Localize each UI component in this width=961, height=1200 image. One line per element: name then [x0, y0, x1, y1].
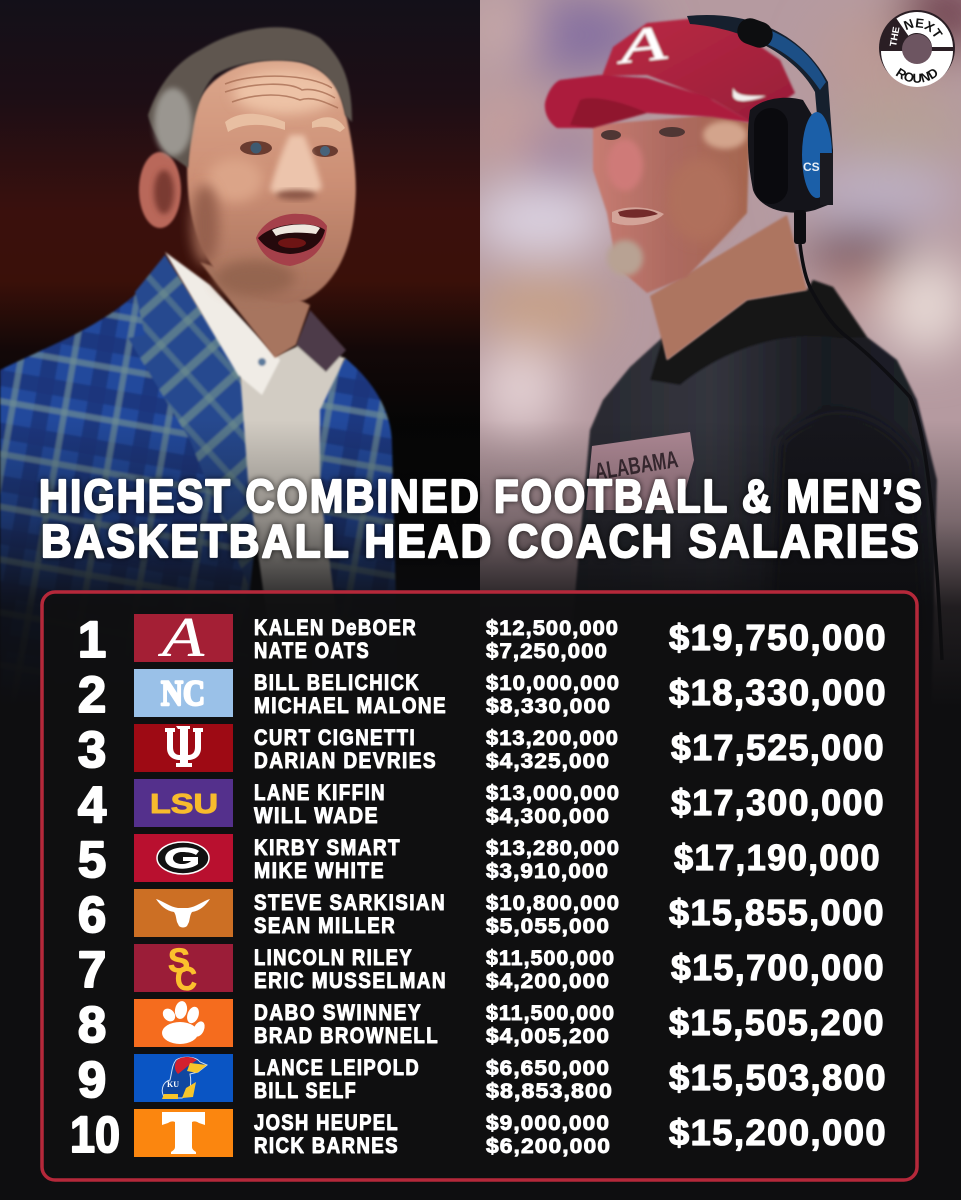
row 9: Kansas: LANCE LEIPOLD — [254, 1055, 420, 1080]
row 1: Alabama: $7,250,000 — [486, 640, 608, 663]
row 10: Tennessee: 10 — [70, 1106, 120, 1163]
row 9: Kansas — [78, 1051, 887, 1108]
row 4: LSU: LSU — [150, 788, 218, 819]
row 1: Alabama: KALEN DeBOER — [254, 615, 417, 640]
row 1: Alabama — [78, 607, 887, 669]
row 2: North Carolina: $8,330,000 — [486, 695, 611, 718]
row 7: USC: $15,700,000 — [671, 947, 885, 988]
neck — [650, 215, 807, 360]
row 10: Tennessee: $9,000,000 — [486, 1112, 610, 1135]
row 10: Tennessee: $6,200,000 — [486, 1135, 611, 1158]
row 9: Kansas: 9 — [78, 1051, 106, 1108]
row 7: USC: $4,200,000 — [486, 970, 610, 993]
face shading — [607, 139, 643, 191]
forehead wrinkles — [225, 76, 338, 108]
panel: salary table — [42, 592, 917, 1180]
hair — [148, 27, 352, 168]
row 9: Kansas: BILL SELF — [254, 1078, 357, 1103]
row 1: Alabama: $19,750,000 — [669, 617, 887, 658]
ear — [139, 152, 181, 228]
headset — [687, 15, 942, 660]
row 3: Indiana: $13,200,000 — [486, 727, 619, 750]
row 2: North Carolina: $18,330,000 — [669, 672, 887, 713]
photo: basketball coach — [0, 0, 480, 660]
row 6: Texas: $10,800,000 — [486, 892, 620, 915]
row 6: Texas: $5,055,000 — [486, 915, 610, 938]
brand logo: The Next Round: THE — [888, 26, 902, 48]
panel frame — [42, 592, 917, 1180]
row 3: Indiana: CURT CIGNETTI — [254, 725, 416, 750]
row 5: Georgia: $17,190,000 — [674, 837, 881, 878]
row 3: Indiana: 3 — [78, 721, 106, 778]
row 8: Clemson: 8 — [78, 996, 106, 1053]
row 2: North Carolina: 2 — [78, 666, 106, 723]
row 1: Alabama: A — [157, 607, 205, 669]
row 9: Kansas: $15,503,800 — [669, 1057, 887, 1098]
row 3: Indiana: $4,325,000 — [486, 750, 610, 773]
headset: CS — [803, 160, 820, 174]
blurred crowd — [465, 0, 961, 435]
brand logo: The Next Round: ROUND — [896, 68, 938, 83]
hoodie — [574, 278, 938, 662]
row 7: USC: LINCOLN RILEY — [254, 945, 413, 970]
row 4: LSU — [78, 776, 885, 833]
row 2: North Carolina — [78, 666, 887, 723]
row 8: Clemson: $15,505,200 — [669, 1002, 885, 1043]
row 7: USC: ERIC MUSSELMAN — [254, 968, 447, 993]
row 7: USC: C — [175, 960, 197, 997]
row 5: Georgia: MIKE WHITE — [254, 858, 385, 883]
cap — [545, 16, 795, 128]
row 9: Kansas: $8,853,800 — [486, 1080, 613, 1103]
bottom fade over photos — [0, 420, 961, 780]
shirt — [164, 251, 346, 590]
row 3: Indiana — [78, 721, 885, 778]
row 10: Tennessee: $15,200,000 — [669, 1112, 887, 1153]
row 4: LSU: $17,300,000 — [671, 782, 885, 823]
row 1: Alabama: 1 — [78, 611, 106, 668]
row 4: LSU: 4 — [78, 776, 107, 833]
row 6: Texas: $15,855,000 — [669, 892, 885, 933]
row 6: Texas — [78, 886, 885, 943]
row 2: North Carolina: BILL BELICHICK — [254, 670, 420, 695]
face shading — [233, 70, 337, 114]
row 5: Georgia: KIRBY SMART — [254, 835, 401, 860]
jacket — [0, 254, 396, 663]
brand logo: The Next Round: NEXT — [904, 18, 943, 37]
eyes and brows — [225, 114, 345, 157]
mouth — [612, 207, 664, 225]
face — [187, 60, 356, 303]
row 1: Alabama: NATE OATS — [254, 638, 370, 663]
mouth — [256, 214, 327, 266]
row 4: LSU: LANE KIFFIN — [254, 780, 386, 805]
row 6: Texas: STEVE SARKISIAN — [254, 890, 446, 915]
row 9: Kansas: KU — [167, 1080, 179, 1089]
row 8: Clemson — [78, 996, 885, 1053]
row 5: Georgia: $13,280,000 — [486, 837, 620, 860]
row 7: USC: $11,500,000 — [486, 947, 615, 970]
row 5: Georgia: 5 — [78, 831, 106, 888]
chest patch: ALABAMA — [593, 446, 680, 486]
row 4: LSU: WILL WADE — [254, 803, 379, 828]
row 7: USC: 7 — [78, 941, 106, 998]
row 8: Clemson: BRAD BROWNELL — [254, 1023, 439, 1048]
row 9: Kansas: $6,650,000 — [486, 1057, 610, 1080]
row 3: Indiana: $17,525,000 — [671, 727, 885, 768]
photo: football coach — [480, 0, 961, 668]
row 2: North Carolina: $10,000,000 — [486, 672, 620, 695]
row 8: Clemson: DABO SWINNEY — [254, 1000, 422, 1025]
row 10: Tennessee: RICK BARNES — [254, 1133, 399, 1158]
nose — [270, 135, 322, 196]
row 2: North Carolina: MICHAEL MALONE — [254, 693, 447, 718]
row 7: USC: S — [168, 942, 190, 980]
neck — [200, 262, 310, 358]
row 8: Clemson: $11,500,000 — [486, 1002, 615, 1025]
eyes — [601, 127, 685, 140]
row 10: Tennessee — [70, 1106, 887, 1163]
row 4: LSU: $13,000,000 — [486, 782, 620, 805]
brand logo: The Next Round — [879, 10, 955, 87]
row 3: Indiana: DARIAN DEVRIES — [254, 748, 437, 773]
row 5: Georgia — [78, 831, 881, 888]
row 5: Georgia: $3,910,000 — [486, 860, 609, 883]
title — [39, 470, 924, 567]
chest patch — [586, 432, 694, 510]
cap: A — [613, 16, 670, 74]
row 2: North Carolina: NC — [161, 673, 205, 713]
row 10: Tennessee: JOSH HEUPEL — [254, 1110, 399, 1135]
face — [593, 115, 750, 293]
row 8: Clemson: $4,005,200 — [486, 1025, 610, 1048]
row 1: Alabama: $12,500,000 — [486, 617, 619, 640]
row 7: USC — [78, 941, 885, 998]
row 6: Texas: SEAN MILLER — [254, 913, 396, 938]
row 6: Texas: 6 — [78, 886, 106, 943]
row 4: LSU: $4,300,000 — [486, 805, 610, 828]
